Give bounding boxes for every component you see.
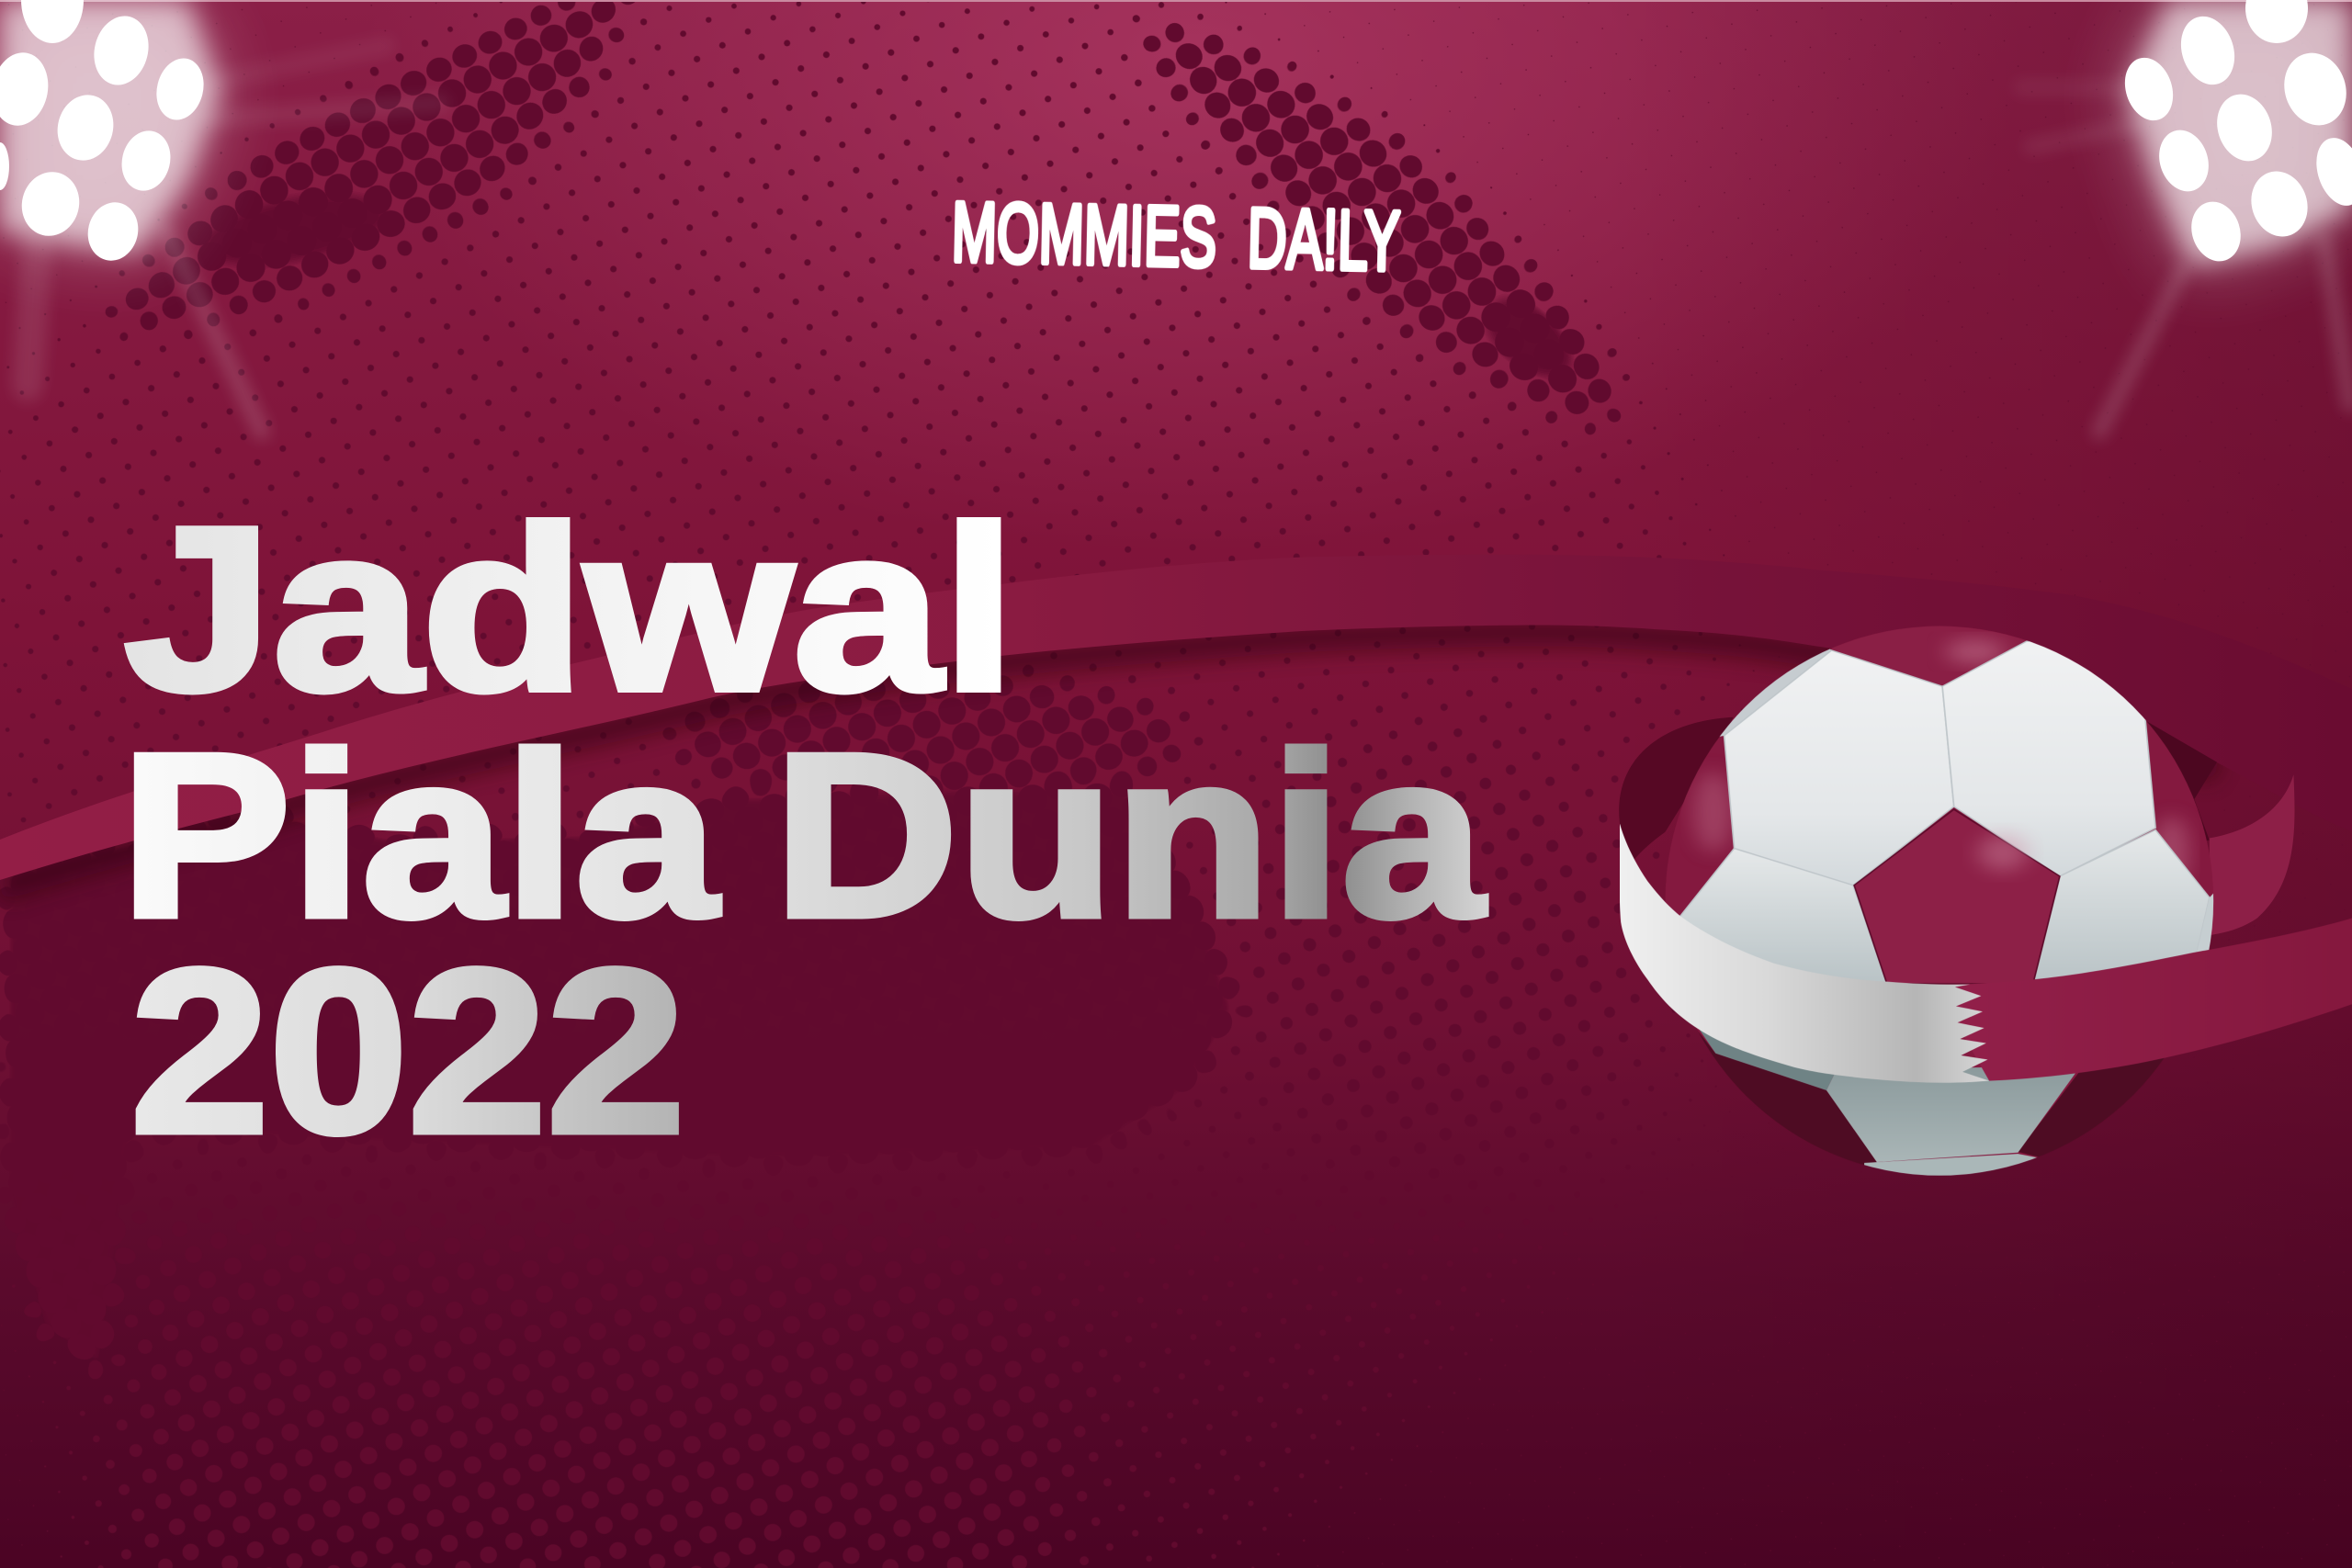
panel: white lower left: [1679, 848, 1885, 982]
panel: lower grey left: [1690, 1017, 1837, 1090]
top edge highlight line: [0, 0, 2352, 2]
title line 1: Jadwal: [124, 478, 1016, 739]
panel: central maroon pentagon: [1854, 809, 2060, 984]
panel: bottom grey: [1864, 1154, 2071, 1185]
ribbon front: maroon section: [1955, 918, 2352, 1081]
right stadium floodlight: [2021, 0, 2352, 432]
football wrapped in Qatar flag ribbon: [1619, 619, 2352, 1185]
panel: white upper left: [1724, 650, 1954, 886]
panel: white lower right: [2033, 829, 2210, 984]
ribbon front: white section with serrated edge: [1620, 824, 1989, 1083]
title: [120, 478, 1486, 1181]
title line 2: Piala: [120, 705, 719, 965]
logo: MOMMIES: [951, 186, 1217, 285]
ribbon band across the page: [0, 555, 2352, 887]
panel: sliver right: [2198, 893, 2214, 952]
ribbon back loop: right: [2146, 721, 2295, 935]
logo: DA!LY: [1247, 192, 1401, 288]
title line 3: 2022: [130, 920, 685, 1181]
panel: sliver upper left: [1720, 649, 1831, 737]
title line 2: Dunia: [774, 705, 1486, 965]
title line 2: [120, 705, 1486, 965]
ribbon back loop: left: [1619, 717, 1733, 862]
panel: white upper right: [1942, 639, 2177, 876]
panel: lower dark right: [2018, 1049, 2177, 1177]
panel: upper maroon: [1900, 626, 2023, 639]
panel: lower dark left: [1698, 1031, 1877, 1165]
panel: lower grey centre: [1826, 1066, 2081, 1162]
left stadium floodlight: [0, 0, 441, 432]
football: [1637, 619, 2217, 1185]
